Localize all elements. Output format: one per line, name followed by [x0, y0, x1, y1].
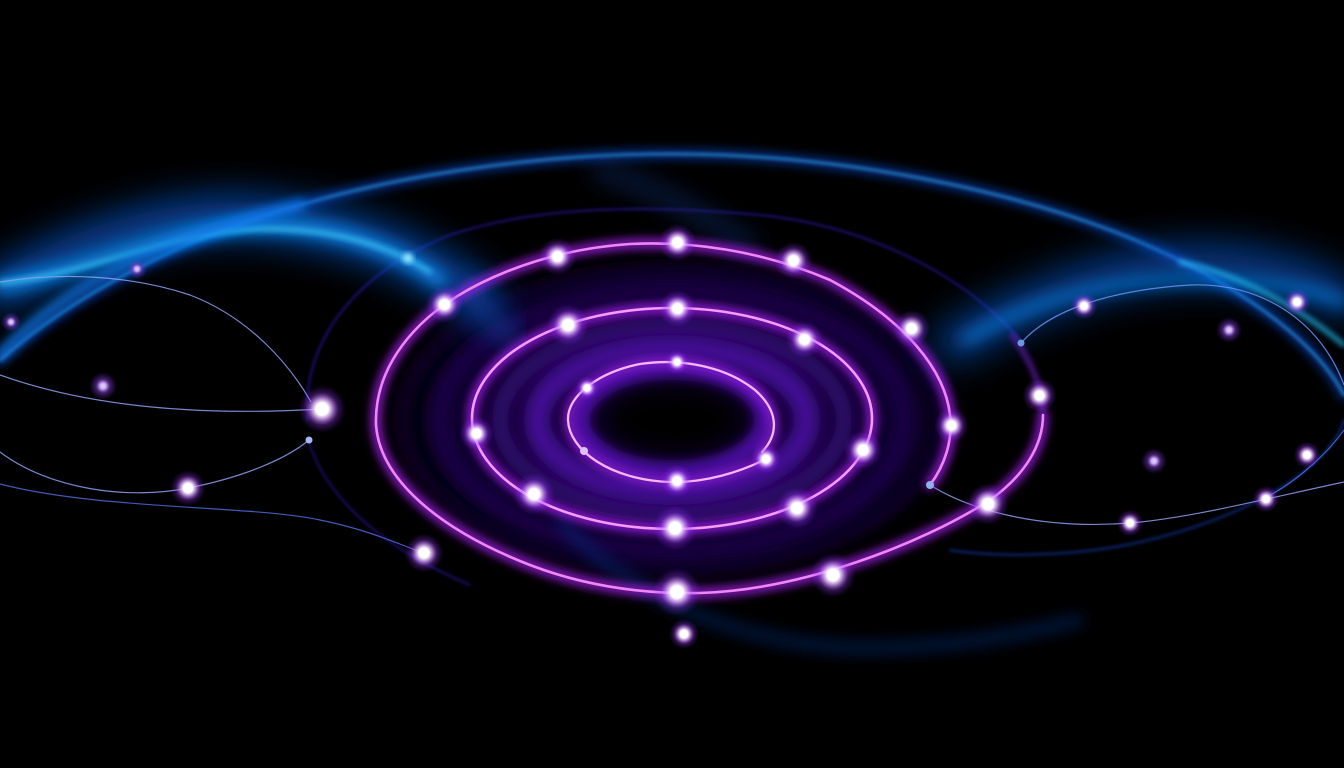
outer spiral ring [376, 243, 1043, 593]
inner spiral ring [568, 362, 774, 482]
left blue light ribbons [0, 205, 510, 355]
middle ring [472, 308, 872, 529]
right blue light ribbons [950, 262, 1344, 345]
large blue orbit [0, 154, 1344, 648]
thin network lines [0, 276, 1344, 553]
central violet glow [402, 270, 942, 570]
glowing nodes on rings [426, 224, 1057, 616]
free floating nodes [1, 253, 1320, 649]
